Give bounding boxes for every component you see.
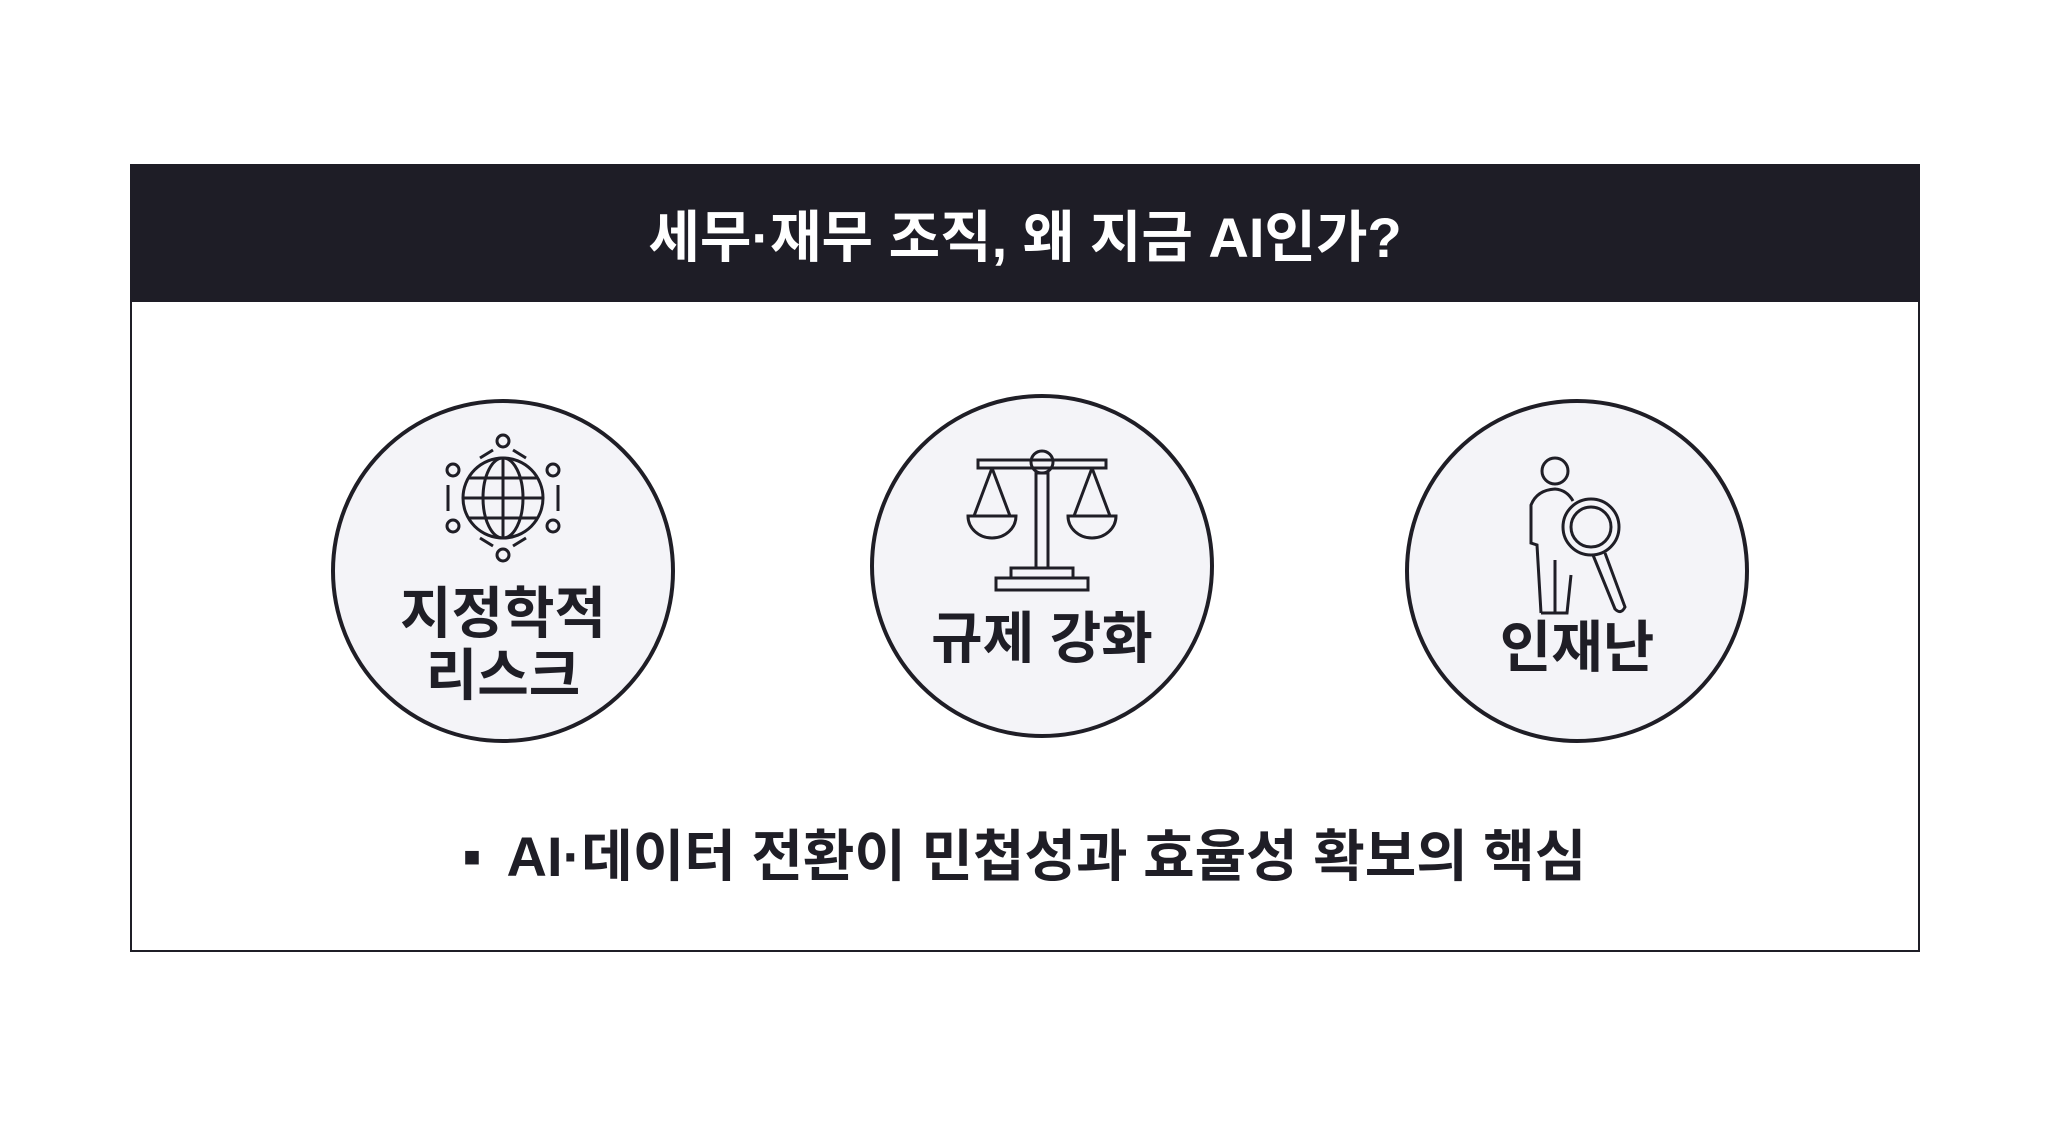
frame <box>130 164 1920 952</box>
label: 규제 강화 <box>931 607 1153 670</box>
icon: scale <box>966 450 1118 592</box>
panel: talent shortage <box>1405 399 1749 743</box>
title <box>130 164 1920 302</box>
title: 세무·재무 조직, 왜 지금 AI인가? <box>648 206 1402 268</box>
icon: person with magnifier <box>1530 456 1627 614</box>
label <box>400 582 606 707</box>
panel: geopolitical risk <box>331 399 675 743</box>
icon: globe network <box>446 434 560 562</box>
panel: regulation <box>870 394 1214 738</box>
bottom bullet text: ■ AI·데이터 전환이 민첩성과 효율성 확보의 핵심 <box>464 825 1586 888</box>
label: 인재난 <box>1500 616 1654 679</box>
label: 리스크 <box>426 644 580 707</box>
label: 지정학적 <box>400 582 606 645</box>
